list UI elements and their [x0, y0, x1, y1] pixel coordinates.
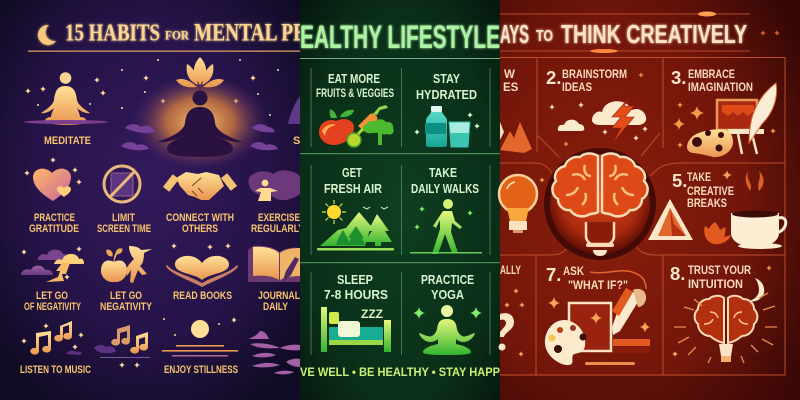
label: stay hydrated	[416, 71, 477, 102]
title: ways to think creatively	[500, 19, 747, 49]
icon: handshake	[163, 172, 237, 200]
bottom band	[500, 376, 800, 400]
icon: brain bulb with rays	[672, 265, 777, 363]
label: brainstorm ideas: IDEAS	[562, 82, 592, 94]
icon: palette, canvas and feather	[673, 83, 777, 157]
label: sleep 7-8 hours: 7-8 HOURS	[324, 287, 388, 302]
label: get fresh air: FRESH AIR	[324, 181, 383, 196]
label: take creative breaks: CREATIVE	[687, 186, 734, 198]
number 8: 8.	[670, 263, 685, 284]
label: ask what if: "WHAT IF?"	[568, 280, 628, 292]
label: journal daily: JOURNAL	[258, 290, 300, 302]
label: stay hydrated: HYDRATED	[416, 87, 477, 102]
label: let go negativity: NEGATIVITY	[100, 301, 153, 313]
icon: music notes left	[21, 321, 84, 355]
icon: heart	[24, 157, 82, 201]
label: sleep 7-8 hours: SLEEP	[337, 272, 373, 287]
title: 15 habits for mental peace	[38, 20, 306, 46]
label: stay hydrated: STAY	[433, 71, 460, 86]
label: enjoy stillness: ENJOY STILLNESS	[164, 364, 238, 376]
label: take creative breaks: BREAKS	[687, 198, 727, 210]
label: get fresh air	[324, 165, 383, 196]
label: practice gratitude: GRATITUDE	[29, 223, 79, 235]
title: 15 habits for mental peace: 15 HABITS	[65, 20, 160, 46]
label: let go negativity: LET GO	[110, 290, 142, 302]
panel: healthy lifestyle	[300, 0, 500, 400]
panel: ways to think creatively	[498, 0, 800, 400]
label: take daily walks: DAILY WALKS	[411, 181, 479, 196]
label: journal daily	[258, 290, 300, 313]
icon: moon over calm water	[162, 317, 238, 357]
label: limit screen time: LIMIT	[112, 212, 135, 224]
icon: water bottle and glass	[414, 106, 480, 147]
card grid outlines	[500, 58, 785, 375]
title: ways to think creatively: AYS	[500, 19, 529, 49]
partial icon and label: sleep at panel edge	[288, 96, 300, 147]
label: let go of negativity: LET GO	[36, 290, 68, 302]
icon: clouds and lightning	[21, 246, 84, 282]
label: journal daily: DAILY	[263, 301, 289, 313]
icon: coffee cup with flame and flower	[704, 170, 786, 249]
label: connect with others: CONNECT WITH	[166, 212, 234, 224]
label: limit screen time: SCREEN TIME	[97, 223, 151, 235]
slogan: live well, be healthy, stay happy: VE WELL • BE HEALTHY • STAY HAPP	[300, 365, 500, 379]
partial icon and label: sleep at panel edge: S	[293, 135, 300, 147]
partial card 1 text: W	[504, 69, 515, 81]
label: let go of negativity	[24, 290, 81, 313]
icon: crescent moon	[748, 278, 764, 302]
label: ask what if	[563, 266, 628, 292]
label: ask what if: ASK	[563, 266, 585, 278]
icon: question mark in card 6	[498, 288, 525, 357]
partial card 1 text: ES	[503, 82, 519, 94]
label: get fresh air: GET	[342, 165, 362, 180]
label: eat more fruits and veggies	[316, 71, 394, 100]
icon: palette, canvas and pencil with swoosh	[545, 271, 650, 365]
icon: clouds and water at right edge	[248, 331, 300, 374]
icon: central brain inside lightbulb	[544, 148, 656, 260]
label: trust your intuition	[688, 265, 752, 291]
partial card 1 text	[503, 69, 519, 94]
label: let go of negativity: OF NEGATIVITY	[24, 301, 81, 313]
title: 15 habits for mental peace: FOR	[165, 28, 190, 42]
label: take daily walks	[411, 165, 479, 196]
icon: central glowing figure with lotus	[121, 57, 278, 170]
label: practice yoga	[421, 272, 474, 302]
label: connect with others	[166, 212, 234, 235]
label: trust your intuition: TRUST YOUR	[688, 265, 752, 277]
label: practice yoga: PRACTICE	[421, 272, 474, 287]
label: exercise regularly: EXERCISE	[258, 212, 300, 224]
icon: pyramid	[648, 199, 693, 240]
panel: mental peace habits	[0, 0, 306, 400]
label: practice gratitude: PRACTICE	[34, 212, 75, 224]
label: brainstorm ideas	[562, 69, 627, 94]
label: exercise regularly: REGULARLY	[251, 223, 305, 235]
icon: bed with zzz: ZZZ	[361, 307, 383, 321]
label: embrace imagination	[688, 69, 753, 94]
icon: apple and sprite	[101, 246, 152, 283]
icon: journal with pen	[248, 246, 300, 283]
title: healthy lifestyle: EALTHY LIFESTYLE	[300, 19, 500, 55]
number 5: 5.	[672, 170, 687, 191]
label: exercise regularly	[251, 212, 305, 235]
partial card 6 label: ALLY	[500, 265, 521, 277]
label: let go negativity	[100, 290, 153, 313]
label: eat more fruits and veggies: EAT MORE	[328, 71, 380, 86]
icon: sun, mountains and trees	[317, 200, 394, 250]
icon: small lightbulb in card 4	[499, 175, 545, 233]
label: meditate: MEDITATE	[44, 135, 91, 147]
label: embrace imagination: IMAGINATION	[688, 82, 753, 94]
label: read books: READ BOOKS	[173, 290, 232, 302]
number 7: 7.	[546, 264, 561, 285]
icon: bed with zzz	[321, 307, 391, 352]
icon: apple, carrot and broccoli	[319, 105, 394, 147]
label: listen to music: LISTEN TO MUSIC	[20, 364, 91, 376]
icon: music notes right	[94, 325, 150, 368]
title: ways to think creatively: TO	[536, 28, 553, 45]
label: practice yoga: YOGA	[431, 287, 465, 302]
icon: mountains in card 1	[500, 122, 532, 153]
icon: exercise figure	[249, 170, 300, 201]
label: trust your intuition: INTUITION	[688, 279, 743, 291]
icon: walking person	[410, 199, 482, 254]
label: practice gratitude	[29, 212, 79, 235]
label: embrace imagination: EMBRACE	[688, 69, 735, 81]
label: take creative breaks: TAKE	[687, 172, 711, 184]
number 2: 2.	[546, 67, 561, 88]
label: take daily walks: TAKE	[429, 165, 457, 180]
icon: storm clouds and lightning	[549, 72, 648, 147]
number 3: 3.	[671, 67, 686, 88]
icon: no screens sign	[104, 166, 140, 202]
label: eat more fruits and veggies: FRUITS & VEGGIES	[316, 88, 394, 100]
title: 15 habits for mental peace: MENTAL PE	[194, 20, 306, 46]
icon: yoga figure	[413, 305, 482, 355]
icon: meditating figure	[24, 72, 108, 125]
icon: open book	[166, 243, 238, 287]
label: sleep 7-8 hours	[324, 272, 388, 302]
stars scattered around the figures	[25, 59, 279, 116]
label: limit screen time	[97, 212, 151, 235]
label: take creative breaks	[687, 172, 734, 210]
label: connect with others: OTHERS	[182, 223, 218, 235]
label: brainstorm ideas: BRAINSTORM	[562, 69, 627, 81]
